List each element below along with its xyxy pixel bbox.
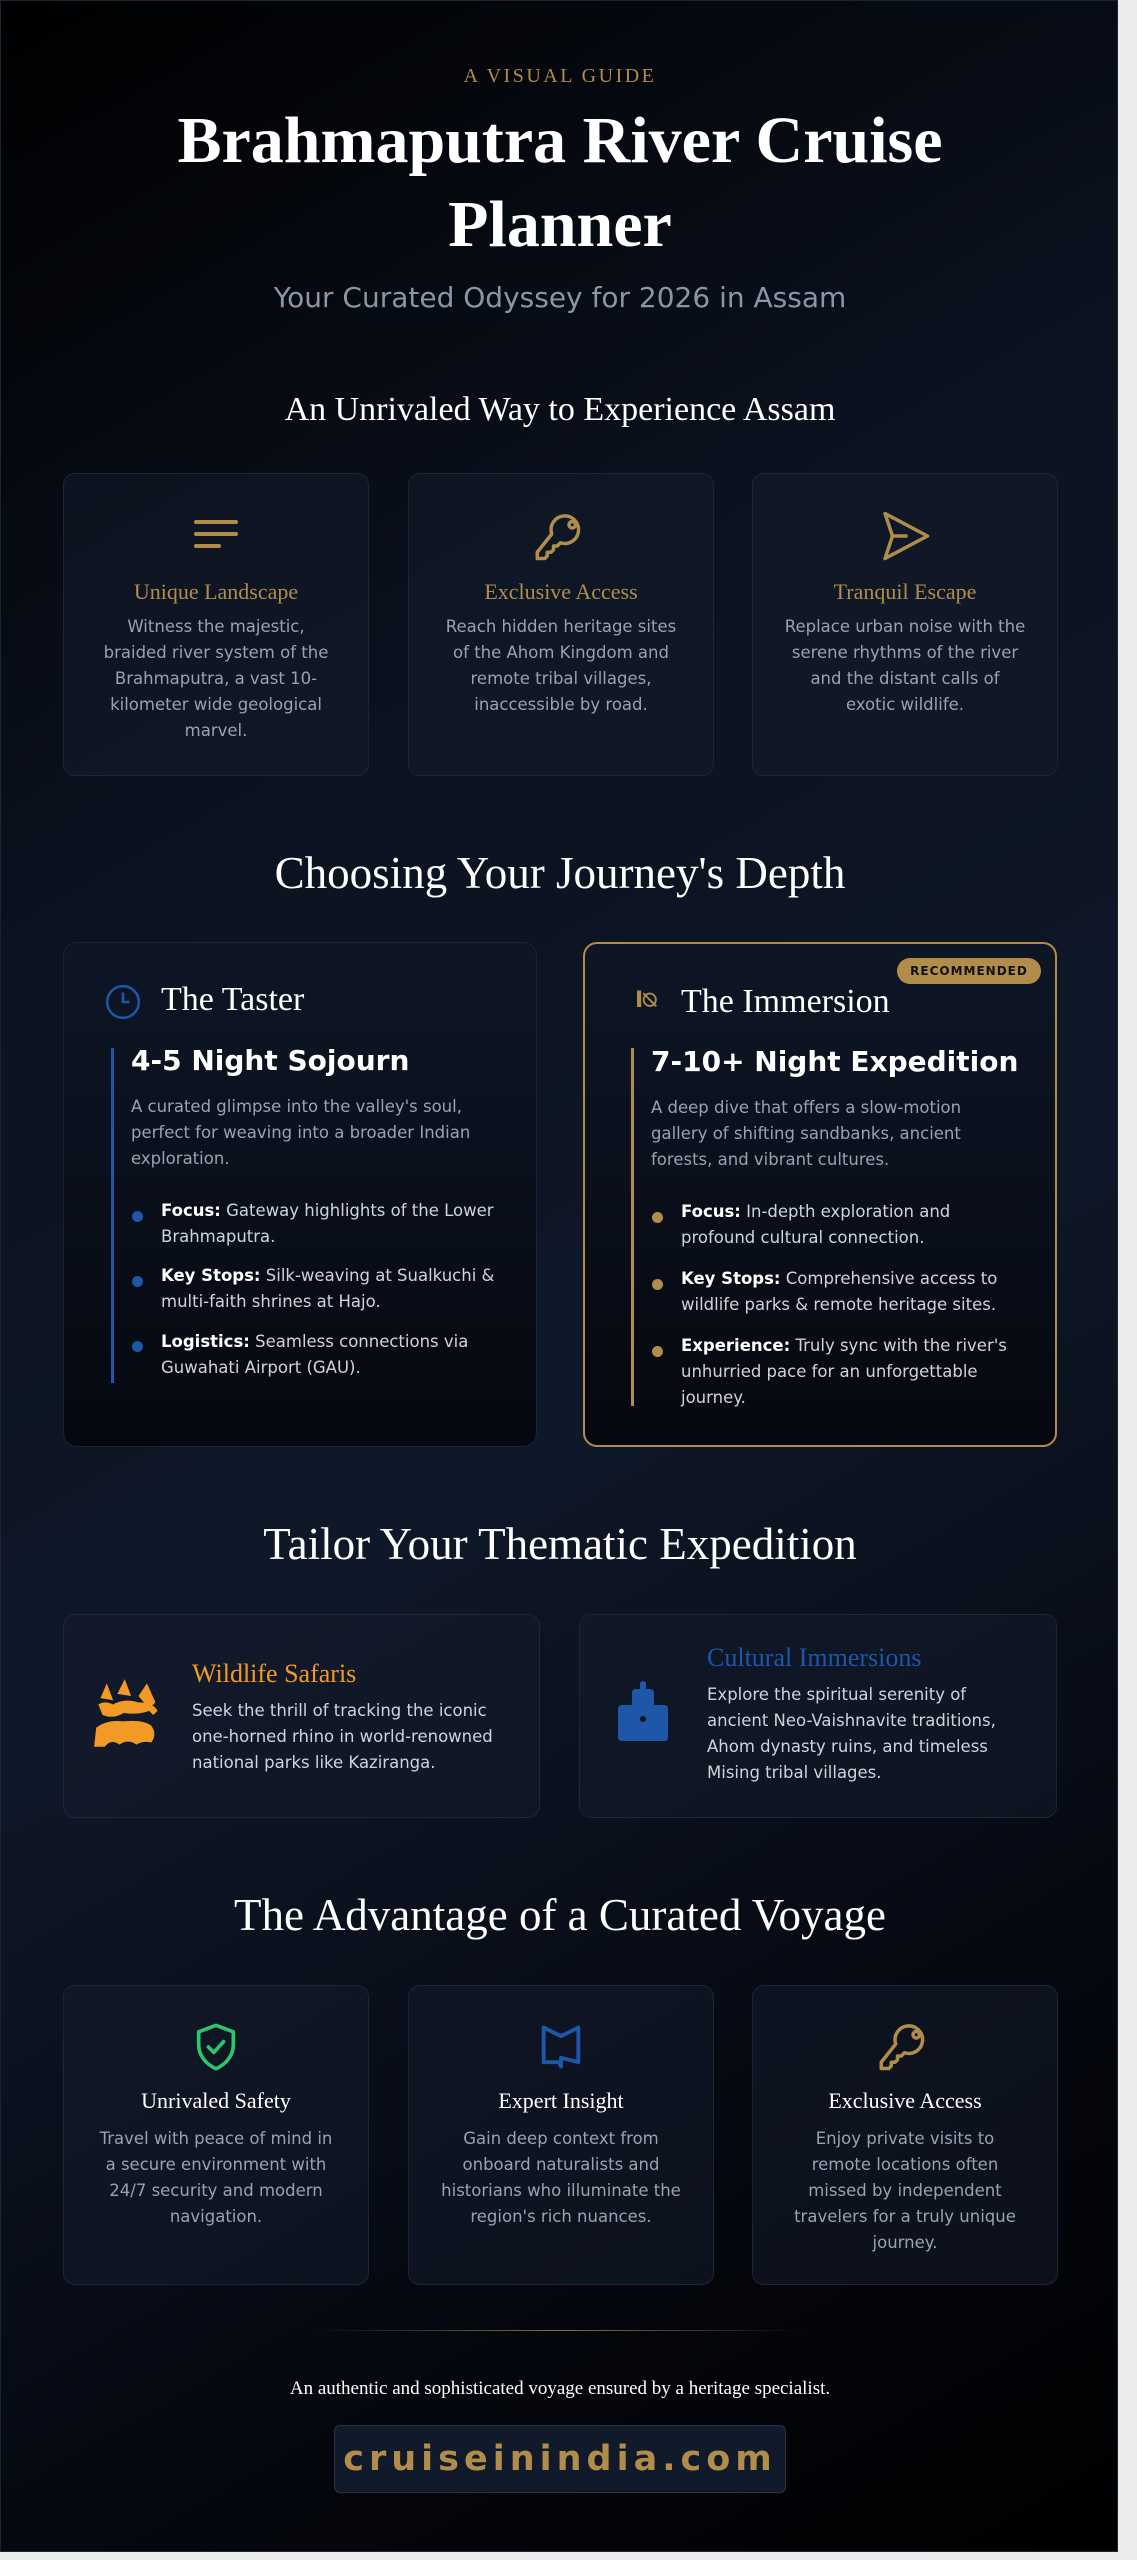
icon: key [880,2024,924,2070]
icon: paw/rhino [94,1679,158,1747]
immersion title: The Immersion [681,983,890,1020]
wildlife title: Wildlife Safaris [192,1659,356,1688]
cultural title: Cultural Immersions [707,1643,921,1672]
card text: Gain deep context from [463,2129,659,2148]
card text: journey. [873,2233,937,2252]
icon: shield [196,2024,236,2070]
taster list [132,1201,494,1377]
wildlife text: Seek the thrill of tracking the iconic one-horned rhino in world-renowned national parks like Kaziranga. [192,1701,493,1772]
card title: Unrivaled Safety [141,2088,291,2113]
card text: onboard naturalists and [463,2155,659,2174]
card title: Exclusive Access [828,2088,982,2113]
title: Brahmaputra River Cruise [177,104,943,177]
immersion list: Experience: Truly sync with the river's unhurried pace for an unforgettable journey. [681,1336,1007,1407]
card title: Exclusive Access [484,579,638,604]
cultural text: ancient Neo-Vaishnavite traditions, Ahom dynasty ruins, and timeless Mising tribal villages. [707,1711,996,1782]
icon: send [883,512,930,560]
taster title: The Taster [161,981,304,1018]
card text: Witness the majestic, braided river system of the Brahmaputra, a vast 10-kilometer wide geological marvel. [104,617,328,740]
panel: exclusive access [408,473,714,776]
card text: historians who illuminate the [441,2181,681,2200]
card text: exotic wildlife. [846,695,964,714]
card text: Reach hidden heritage sites of the Ahom Kingdom and remote tribal villages, inaccessible by road. [446,617,676,714]
icon: temple [618,1681,668,1741]
card text: Enjoy private visits to [816,2129,994,2148]
icon: book [542,2026,580,2068]
badge: recommended [897,958,1041,984]
card text: remote locations often [812,2155,998,2174]
badge: recommended: RECOMMENDED [910,964,1028,978]
subtitle: Your Curated Odyssey for 2026 in Assam [274,281,846,314]
expedition heading: 7-10+ Night Expedition [651,1045,1018,1078]
panel: the immersion [583,942,1057,1447]
title: Planner [448,188,672,261]
taster list: Logistics: Seamless connections via Guwahati Airport (GAU). [161,1332,468,1377]
immersion list: Key Stops: Comprehensive access to wildlife parks & remote heritage sites. [681,1269,997,1314]
card text: and the distant calls of [810,669,1000,688]
card text: 24/7 security and modern [109,2181,323,2200]
cultural text: Explore the spiritual serenity of [707,1685,966,1704]
heading: thematic: Tailor Your Thematic Expedition [263,1519,857,1569]
footer brand box [334,2425,786,2493]
heading: advantage: The Advantage of a Curated Voyage [234,1890,886,1940]
panel: safety [63,1985,369,2285]
card text: region's rich nuances. [470,2207,652,2226]
icon: key [536,514,580,560]
card text: serene rhythms of the river [792,643,1018,662]
immersion list [652,1202,1007,1407]
gold bar [631,1048,634,1406]
panel: cultural immersions [579,1614,1057,1818]
card text [794,2129,1016,2252]
taster description: A curated glimpse into the valley's soul, perfect for weaving into a broader Indian exploration. [131,1097,470,1168]
panel: unique landscape [63,473,369,776]
panel: expert insight [408,1985,714,2285]
eyebrow: A VISUAL GUIDE [464,65,656,87]
card text: Travel with peace of mind in [100,2129,332,2148]
icon: lines [194,520,238,548]
immersion description: A deep dive that offers a slow-motion gallery of shifting sandbanks, ancient forests, and vibrant cultures. [651,1098,961,1169]
panel: exclusive access 2 [752,1985,1058,2285]
card text [100,2129,332,2226]
immersion list: Focus: In-depth exploration and [681,1202,950,1221]
panel: the taster [63,942,537,1447]
card text [785,617,1025,714]
immersion list: profound cultural connection. [681,1228,924,1247]
heading: unrivaled: An Unrivaled Way to Experience Assam [285,391,835,428]
card text: navigation. [170,2207,262,2226]
icon: immersion: I⍉ [635,988,656,1013]
card text: Replace urban noise with the [785,617,1025,636]
footer note: An authentic and sophisticated voyage ensured by a heritage specialist. [290,2378,830,2399]
title [177,104,943,261]
sojourn heading: 4-5 Night Sojourn [131,1044,409,1077]
card title: Unique Landscape [134,579,298,604]
card title: Tranquil Escape [834,579,976,604]
taster list: Focus: Gateway highlights of the Lower Brahmaputra. [161,1201,494,1246]
card text: missed by independent [808,2181,1002,2200]
card text: a secure environment with [106,2155,326,2174]
heading: journey depth: Choosing Your Journey's Depth [275,848,845,898]
card text: travelers for a truly unique [794,2207,1016,2226]
panel: tranquil escape [752,473,1058,776]
card text [441,2129,681,2226]
taster list: Key Stops: Silk-weaving at Sualkuchi & multi-faith shrines at Hajo. [161,1266,494,1311]
panel: wildlife safaris [63,1614,540,1818]
footer brand box: cruiseinindia.com [343,2439,777,2479]
blue bar [111,1048,114,1383]
icon: clock [106,984,140,1020]
card title: Expert Insight [498,2088,624,2113]
